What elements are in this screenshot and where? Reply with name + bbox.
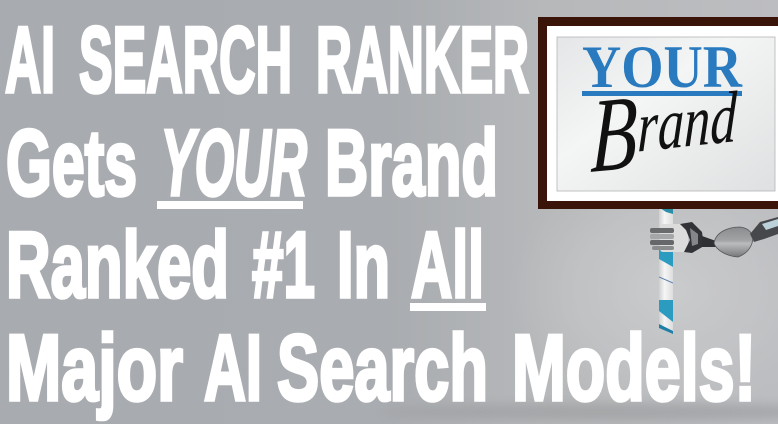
underline: YOUR [157,201,303,209]
line 2: Gets YOUR Brand: Gets [6,110,137,215]
line 4: Major AI Search Models!: AI [204,315,262,420]
sign text: Brand: B [589,73,639,196]
sign board [538,17,778,209]
line 1: AI SEARCH RANKER: RANKER [316,7,529,112]
sign text: YOUR: YOUR [582,34,743,100]
line 2: Gets YOUR Brand: YOUR [161,110,307,215]
line 2: Gets YOUR Brand [6,110,498,215]
robot hand [650,222,704,253]
line 3: Ranked #1 In All: In [337,212,390,317]
robot forearm [702,236,716,247]
line 1: AI SEARCH RANKER: SEARCH [79,7,292,112]
sign underline [582,91,742,96]
line 4: Major AI Search Models! [6,315,756,420]
line 4: Major AI Search Models!: Major [6,315,183,420]
line 3: Ranked #1 In All: Ranked [6,212,229,317]
sign frame [538,17,778,209]
sign pole [659,209,673,334]
line 4: Major AI Search Models!: Search [277,315,488,420]
robot upper arm [750,217,778,242]
sign text: Brand: rand [637,76,739,168]
sign panel [557,37,775,191]
line 2: Gets YOUR Brand: Brand [325,110,498,215]
line 3: Ranked #1 In All: #1 [252,212,315,317]
line 1: AI SEARCH RANKER: AI [5,7,55,112]
sign mat [547,26,778,201]
line 3: Ranked #1 In All: All [411,212,484,317]
underline: All [410,303,486,311]
robot arm [650,217,778,257]
